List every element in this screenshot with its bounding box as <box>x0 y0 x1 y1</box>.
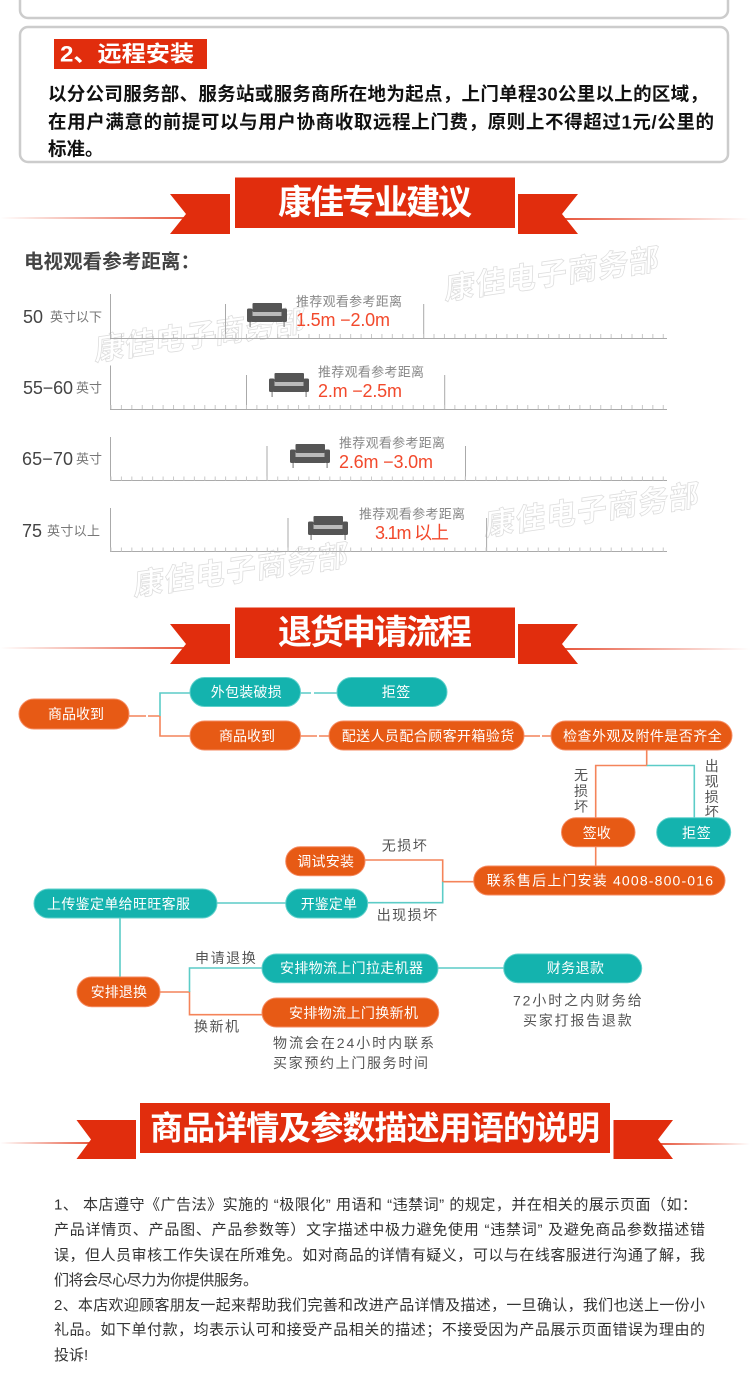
node: goods received <box>19 699 129 729</box>
text block: remote installation terms <box>48 84 714 160</box>
icon: sofa <box>269 373 309 397</box>
text block: statement: 误，但人员审核工作失误在所难免。如对商品的详情有疑义，可以与在线客服进行沟通了解，我 <box>54 1247 705 1264</box>
icon: sofa <box>308 516 348 540</box>
node: issue appraisal form <box>286 889 368 918</box>
connectors: exchange branch <box>160 968 504 1015</box>
label: no damage vertical: 损 <box>574 783 588 799</box>
node: debug and install: 调试安装 <box>297 854 354 870</box>
node: goods received <box>190 721 300 750</box>
panel: remote installation <box>20 27 728 162</box>
node: open box inspection <box>329 721 524 750</box>
flowchart: return application <box>19 678 732 1071</box>
connectors: inspection branch <box>596 750 694 866</box>
node: contact after-sales: 联系售后上门安装 4008-800-016 <box>487 873 713 889</box>
node: logistics picks up machine: 安排物流上门拉走机器 <box>280 960 423 976</box>
node: issue appraisal form: 开鉴定单 <box>301 896 357 912</box>
text block: statement: 们将会尽心尽力为你提供服务。 <box>54 1272 258 1289</box>
node: upload form to customer service: 上传鉴定单给旺旺客服 <box>47 896 190 912</box>
node: goods received: 商品收到 <box>219 728 275 744</box>
watermark: 康佳电子商务部 <box>444 242 660 307</box>
node: refuse delivery <box>337 678 447 706</box>
heading: TV viewing distance: 电视观看参考距离： <box>24 250 200 273</box>
connectors: first branch <box>129 693 551 736</box>
label: screen size <box>23 307 102 327</box>
label: screen size: 英寸 <box>76 452 102 466</box>
label: damaged vertical: 损 <box>705 789 719 805</box>
node: arrange return or exchange <box>77 977 160 1007</box>
node: damaged packaging <box>190 678 300 706</box>
node: sign for delivery <box>562 818 635 847</box>
banner: description terms <box>0 1103 750 1159</box>
label: damaged vertical: 坏 <box>705 804 719 820</box>
panel: previous section box <box>20 0 728 18</box>
node: check appearance and accessories: 检查外观及附件是否齐全 <box>563 728 722 744</box>
text block: statement: 投诉! <box>54 1347 88 1364</box>
label: damaged vertical: 现 <box>705 774 719 790</box>
banner: Konka professional advice: 康佳专业建议 <box>278 184 472 222</box>
label: exchange: 换新机 <box>194 1019 239 1035</box>
label: damaged vertical <box>705 758 719 820</box>
label: screen size <box>22 521 100 541</box>
connectors: after-sales branch <box>120 860 474 977</box>
note: refund within 72 hours: 72小时之内财务给 <box>513 993 642 1009</box>
watermark: 康佳电子商务部 <box>484 478 700 543</box>
chart row: 65-70 inch <box>22 436 667 480</box>
node: contact after-sales <box>474 866 725 895</box>
node: open box inspection: 配送人员配合顾客开箱验货 <box>342 728 514 744</box>
label: recommended distance: 推荐观看参考距离 <box>318 364 424 380</box>
label: recommended distance: 推荐观看参考距离 <box>296 294 402 309</box>
node: goods received: 商品收到 <box>48 706 104 722</box>
node: debug and install <box>286 847 365 876</box>
note: logistics contact <box>273 1035 434 1071</box>
label: recommended distance: 3.1m 以上 <box>375 523 449 543</box>
icon: sofa <box>247 303 287 327</box>
label: recommended distance <box>296 294 402 330</box>
label: screen size <box>23 378 102 398</box>
text block: statement: 产品详情页、产品图、产品参数等）文字描述中极力避免使用 “违禁词” 及避免商品参数描述错 <box>54 1220 705 1238</box>
note: logistics contact: 买家预约上门服务时间 <box>273 1055 428 1071</box>
label: screen size: 50 <box>23 307 43 327</box>
chart row: 55-60 inch <box>23 364 667 410</box>
icon: sofa <box>290 444 330 468</box>
node: finance refund: 财务退款 <box>547 960 604 976</box>
heading: remote installation: 2、远程安装 <box>60 42 194 66</box>
watermark: 康佳电子商务部 <box>133 538 349 603</box>
banner: return process: 退货申请流程 <box>278 614 472 652</box>
banner: description terms: 商品详情及参数描述用语的说明 <box>150 1110 600 1146</box>
label: no damage vertical: 无 <box>574 767 588 783</box>
note: logistics contact: 物流会在24小时内联系 <box>273 1035 434 1051</box>
label: screen size: 65−70 <box>22 449 73 469</box>
text block: statement: 礼品。如下单付款，均表示认可和接受产品相关的描述；不接受因为产品展示页面错误为理由的 <box>54 1322 705 1338</box>
node: logistics picks up machine <box>262 954 438 983</box>
node: damaged packaging: 外包装破损 <box>211 684 282 700</box>
banner: Konka professional advice <box>0 178 750 234</box>
text block: statement: 1、 本店遵守《广告法》实施的 “极限化” 用语和 “违禁词” 的规定，并在相关的展示页面（如： <box>54 1196 697 1214</box>
label: screen size: 55−60 <box>23 378 73 398</box>
node: finance refund <box>504 954 642 983</box>
label: recommended distance: 推荐观看参考距离 <box>359 506 465 522</box>
label: recommended distance: 1.5m −2.0m <box>296 310 390 330</box>
node: check appearance and accessories <box>551 721 732 750</box>
text block: remote installation terms: 以分公司服务部、服务站或服务商所在地为起点，上门单程30公里以上的区域， <box>48 84 708 104</box>
label: recommended distance: 2.6m −3.0m <box>339 452 433 472</box>
text block: statement <box>54 1196 705 1364</box>
text block: remote installation terms: 标准。 <box>48 138 104 160</box>
label: no damage vertical <box>574 767 588 814</box>
node: upload form to customer service <box>34 889 217 918</box>
node: refuse delivery: 拒签 <box>382 684 410 700</box>
node: logistics delivers new machine: 安排物流上门换新机 <box>289 1005 418 1021</box>
label: screen size: 英寸以上 <box>47 524 100 538</box>
label: apply for return: 申请退换 <box>195 950 256 966</box>
label: screen size: 75 <box>22 521 42 541</box>
label: screen size: 英寸以下 <box>50 310 102 324</box>
node: sign for delivery: 签收 <box>583 825 611 841</box>
label: recommended distance <box>339 436 445 472</box>
banner: return process <box>0 608 750 664</box>
label: damaged vertical: 出 <box>705 758 719 774</box>
text block: statement: 2、本店欢迎顾客朋友一起来帮助我们完善和改进产品详情及描述，一旦确认，我们也送上一份小 <box>54 1297 705 1314</box>
text block: remote installation terms: 在用户满意的前提可以与用户协商收取远程上门费，原则上不得超过1元/公里的 <box>48 112 714 132</box>
label: screen size <box>22 449 102 469</box>
watermark: 康佳电子商务部 <box>94 304 306 368</box>
label: no damage: 无损坏 <box>382 838 427 854</box>
label: screen size: 英寸 <box>76 380 102 396</box>
node: refuse delivery <box>657 818 731 847</box>
label: no damage vertical: 坏 <box>574 798 588 814</box>
note: refund within 72 hours <box>513 993 642 1029</box>
heading: remote installation <box>54 39 207 69</box>
label: recommended distance <box>359 506 465 543</box>
note: refund within 72 hours: 买家打报告退款 <box>523 1013 632 1029</box>
chart row: over 75 inch <box>22 506 667 552</box>
label: recommended distance <box>318 364 424 401</box>
label: damaged: 出现损坏 <box>377 907 437 923</box>
node: arrange return or exchange: 安排退换 <box>91 984 147 1000</box>
label: recommended distance: 2.m −2.5m <box>318 381 402 401</box>
label: recommended distance: 推荐观看参考距离 <box>339 436 445 450</box>
node: refuse delivery: 拒签 <box>682 825 711 841</box>
node: logistics delivers new machine <box>262 998 439 1027</box>
chart row: under 50 inch <box>23 294 667 338</box>
